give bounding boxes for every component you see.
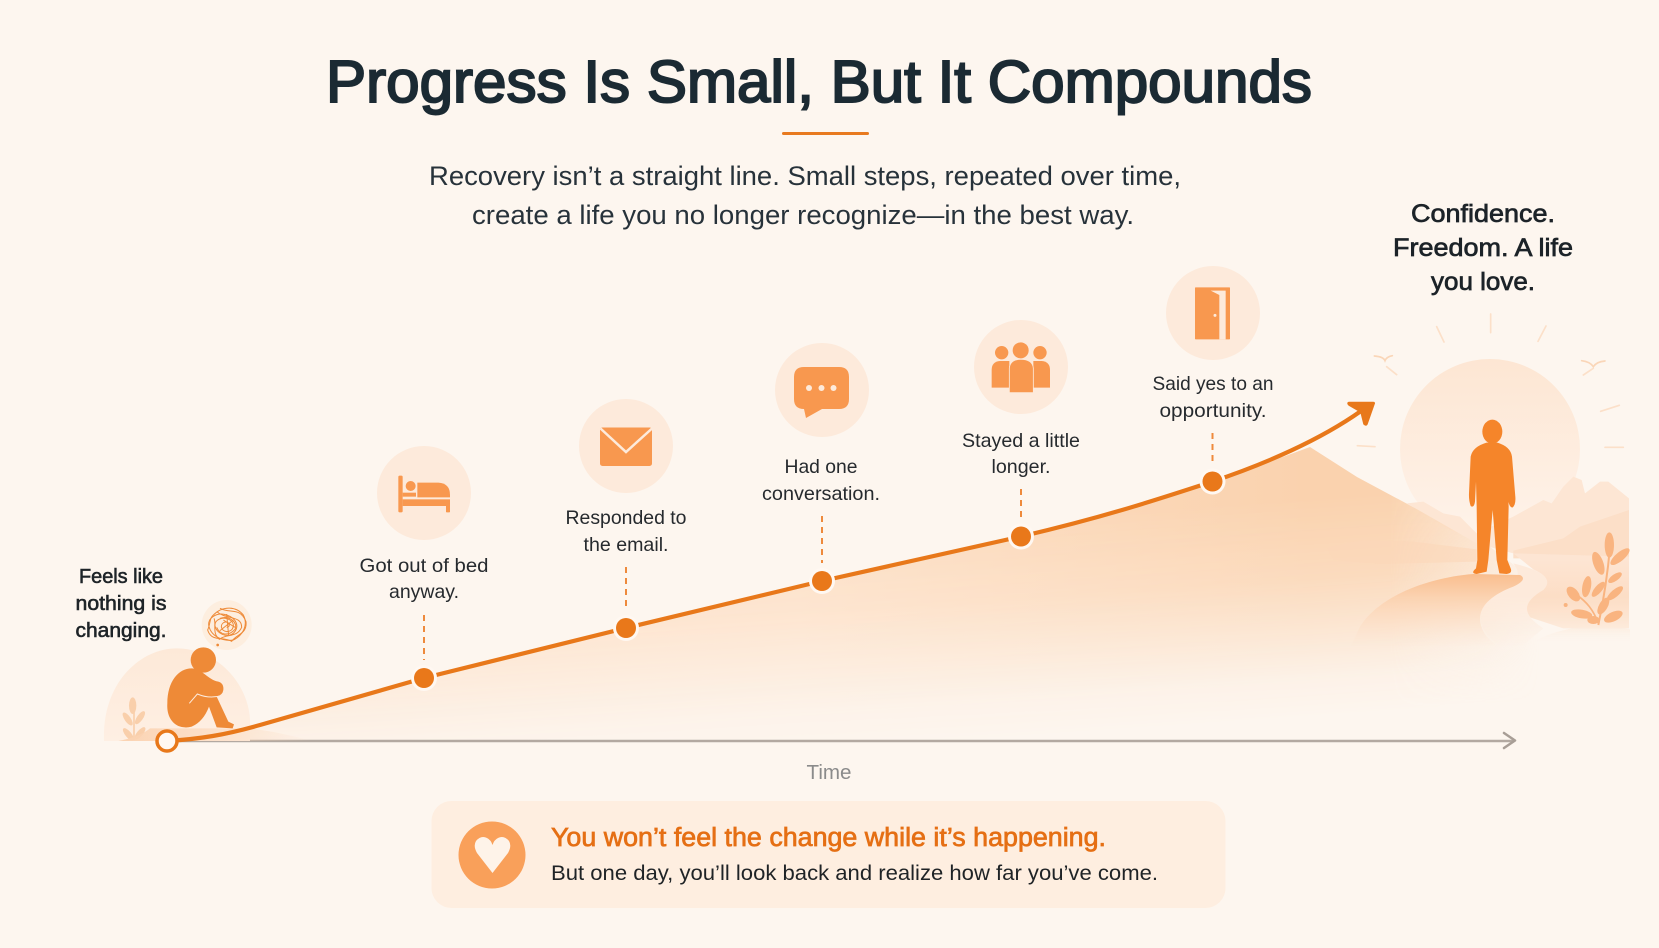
icon: heart bbox=[458, 822, 526, 888]
step 1: got out of bed: anyway. bbox=[389, 581, 459, 603]
plant bbox=[121, 697, 147, 742]
area under the growth curve with mountain bbox=[255, 447, 1518, 733]
river bbox=[1504, 564, 1547, 626]
thought bubble bbox=[202, 600, 252, 650]
sun rays bbox=[1357, 314, 1623, 447]
birds bbox=[1374, 356, 1605, 367]
start point bbox=[157, 731, 177, 751]
right bank bbox=[1513, 553, 1629, 628]
destination label: you love. bbox=[1431, 268, 1535, 296]
step 4: stayed a little longer: Stayed a little bbox=[962, 430, 1080, 452]
title underline bbox=[782, 132, 869, 135]
label: Feels like nothing is changing: changing. bbox=[76, 620, 166, 642]
sun bbox=[1400, 359, 1580, 539]
standing person bbox=[1469, 420, 1515, 574]
growth curve with arrow bbox=[167, 402, 1374, 741]
step 2: responded to the email: the email. bbox=[584, 534, 668, 556]
backdrop half circle bbox=[104, 648, 250, 741]
icon: open door bbox=[1166, 266, 1260, 360]
label: Feels like nothing is changing bbox=[76, 566, 166, 642]
ground with river, fading downward bbox=[1363, 554, 1630, 632]
step 5: said yes to an opportunity bbox=[1152, 266, 1274, 494]
mound bbox=[1562, 628, 1630, 631]
subtitle bbox=[429, 161, 1181, 230]
ground bbox=[118, 728, 313, 741]
step 3: had one conversation bbox=[762, 343, 880, 594]
icon: bed bbox=[377, 446, 471, 540]
plant bbox=[1564, 532, 1632, 625]
near ridge bbox=[1513, 510, 1629, 558]
subtitle: Recovery isn’t a straight line. Small steps, repeated over time, bbox=[429, 161, 1181, 191]
step 1: got out of bed bbox=[360, 446, 488, 691]
icon: envelope bbox=[579, 399, 673, 493]
callout: You won’t feel the change while it’s happening. bbox=[551, 824, 1106, 852]
icon: group of people bbox=[974, 320, 1068, 414]
step 4: stayed a little longer: longer. bbox=[992, 456, 1050, 478]
seated person bbox=[167, 647, 234, 728]
subtitle: create a life you no longer recognize—in the best way. bbox=[472, 200, 1134, 230]
step 5: said yes to an opportunity: opportunity. bbox=[1160, 400, 1266, 422]
time axis bbox=[167, 733, 1515, 748]
sky: sun, rays and birds bbox=[1357, 314, 1623, 539]
step 2: responded to the email: Responded to bbox=[566, 507, 687, 529]
label: Feels like nothing is changing: Feels like bbox=[79, 566, 163, 588]
destination label bbox=[1393, 200, 1573, 296]
destination label: Confidence. bbox=[1411, 200, 1555, 228]
callout: But one day, you’ll look back and realize how far you’ve come. bbox=[551, 861, 1158, 885]
hill ground bbox=[1363, 574, 1523, 632]
step 3: had one conversation: Had one bbox=[784, 456, 858, 478]
step 2: responded to the email bbox=[566, 399, 687, 641]
step 4: stayed a little longer bbox=[962, 320, 1080, 550]
title: Progress Is Small, But It Compounds bbox=[326, 49, 1312, 115]
distant mountains bbox=[1407, 477, 1629, 557]
icon: speech bubble bbox=[775, 343, 869, 437]
label: Feels like nothing is changing: nothing is bbox=[76, 593, 166, 615]
step 3: had one conversation: conversation. bbox=[762, 483, 880, 505]
step 5: said yes to an opportunity: Said yes to an bbox=[1152, 373, 1274, 395]
axis label: Time: Time bbox=[806, 762, 852, 784]
callout bbox=[432, 801, 1226, 908]
lake band bbox=[1327, 540, 1477, 564]
scribble bbox=[208, 608, 246, 641]
destination scene: mountains, person, plant bbox=[1327, 420, 1632, 655]
destination label: Freedom. A life bbox=[1393, 234, 1573, 262]
step 1: got out of bed: Got out of bed bbox=[360, 555, 488, 577]
starting scene: seated person bbox=[104, 600, 313, 742]
